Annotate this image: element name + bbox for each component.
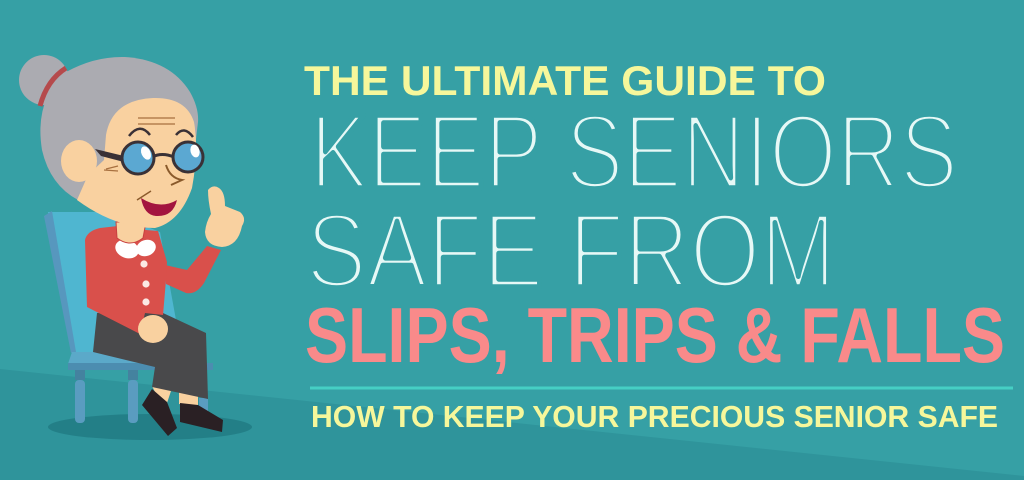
- divider line: [310, 386, 1013, 390]
- neck: [116, 222, 146, 243]
- heading: the ultimate guide to: THE ULTIMATE GUIDE TO: [304, 57, 826, 104]
- subtitle: HOW TO KEEP YOUR PRECIOUS SENIOR SAFE: [311, 399, 998, 434]
- ear: [61, 140, 97, 182]
- wrinkles: [104, 118, 175, 171]
- nose: [166, 165, 182, 185]
- hair: [40, 57, 198, 200]
- hand on knee: [138, 315, 168, 343]
- raised arm: [165, 246, 221, 293]
- floor shadow: [48, 414, 252, 440]
- illustration: grandmother seated on chair: [19, 55, 252, 440]
- hair bun: [19, 55, 69, 105]
- mouth: [137, 191, 177, 216]
- skirt: [93, 313, 208, 399]
- shoes: [142, 389, 223, 436]
- cardigan buttons: [140, 260, 150, 306]
- heading: safe from: SAFE FROM: [306, 192, 836, 310]
- chair: [44, 211, 213, 423]
- eyebrows: [129, 129, 193, 137]
- red cardigan: [85, 226, 167, 334]
- face: [77, 98, 196, 228]
- thumbs-up hand: [205, 186, 244, 247]
- hair tie: [40, 68, 66, 106]
- socks and ankles: [152, 386, 172, 403]
- white collar: [113, 236, 158, 262]
- glasses: [95, 142, 203, 174]
